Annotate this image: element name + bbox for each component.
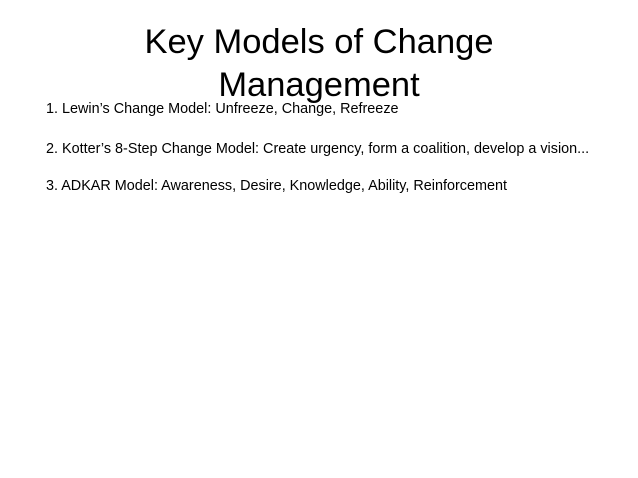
title: Key Models of Change bbox=[144, 23, 494, 61]
text block: Lewin: 1. Lewin’s Change Model: Unfreeze, Change, Refreeze bbox=[46, 101, 399, 117]
text block: ADKAR: 3. ADKAR Model: Awareness, Desire, Knowledge, Ability, Reinforcement bbox=[46, 178, 507, 194]
text block: Kotter: 2. Kotter’s 8-Step Change Model: Create urgency, form a coalition, develop a vision... bbox=[46, 141, 589, 157]
title bbox=[144, 23, 494, 104]
title: Management bbox=[218, 66, 420, 104]
